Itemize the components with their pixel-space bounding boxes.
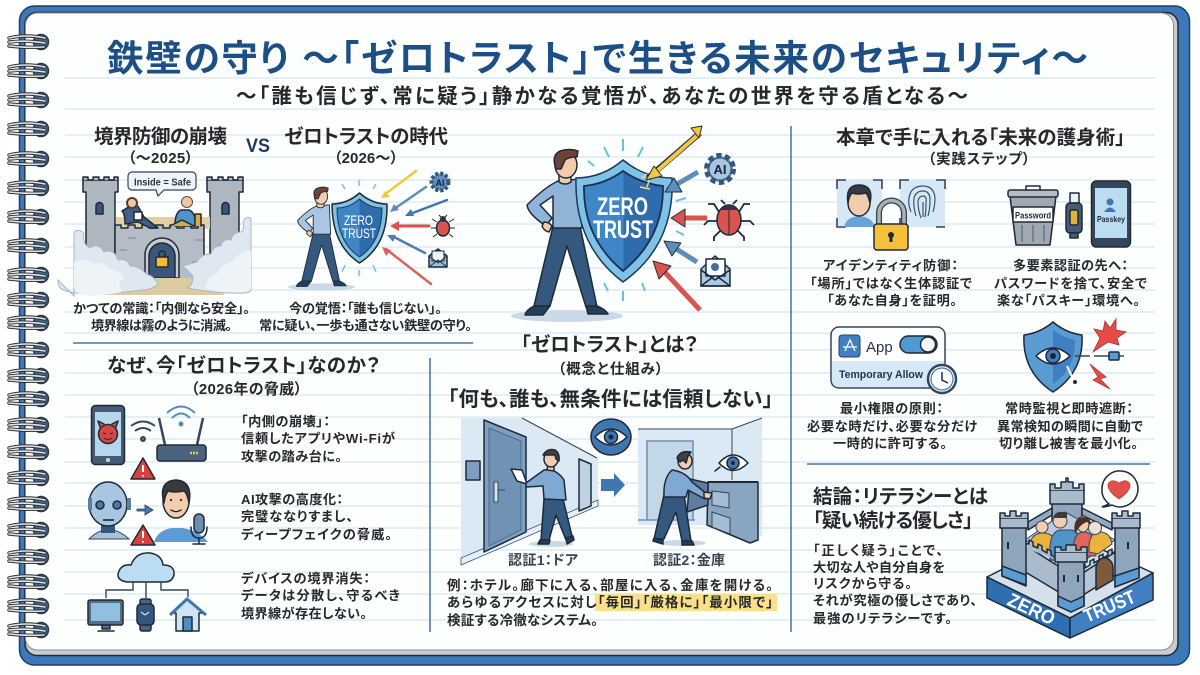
threat arrows small [381, 171, 447, 284]
subheading: concept: （概念と仕組み） [558, 361, 663, 378]
icon: security key [1066, 193, 1082, 238]
text: device perimeter [241, 570, 400, 621]
shield label big [593, 193, 653, 244]
captions: old thinking: かつての常識：「内側なら安全」。 [73, 300, 250, 316]
caption: least privilege [807, 400, 977, 451]
text: inner collapse: 「内側の崩壊」： [241, 413, 330, 429]
label: auth 2: 認証2：金庫 [653, 552, 725, 568]
captions: new resolve: 今の覚悟：「誰も信じない」。 [289, 300, 442, 316]
body text: conclusion: リスクから守る。 [813, 575, 912, 591]
icon: mail small [429, 249, 447, 267]
text: inner collapse [241, 413, 395, 464]
caption: monitoring [997, 400, 1143, 451]
icon: house [170, 599, 206, 631]
icon: large eye [591, 419, 631, 455]
text: AI attacks: ディープフェイクの脅威。 [241, 526, 392, 542]
caption: least privilege: 一時的に許可する。 [833, 435, 947, 451]
text: AI attacks [241, 491, 392, 542]
icon: red burst [1093, 319, 1126, 352]
caption: identity: 「あなた自身」を証明。 [827, 292, 957, 308]
panel: what is zero trust [447, 333, 777, 628]
icon: AI gear [707, 156, 733, 182]
text: device perimeter: 境界線が存在しない。 [241, 605, 367, 621]
heading: zero trust era: ゼロトラストの時代 [284, 125, 448, 148]
icon: passkey phone [1092, 181, 1130, 247]
text: device perimeter: デバイスの境界消失： [241, 570, 370, 586]
panel: conclusion [813, 471, 1153, 638]
icon: monitor [88, 600, 123, 631]
icon: warning two [131, 525, 155, 545]
icon: AI gear: AI [714, 162, 726, 177]
heading: conclusion: 「疑い続ける優しさ」 [813, 510, 973, 532]
caption: beyond MFA: 多要素認証の先へ： [1013, 257, 1128, 273]
illustration: person with shield and threats [288, 180, 387, 291]
body text: 例：ホテル。廊下に入る、部屋に入る、金庫を開ける。 [447, 577, 773, 593]
shield label small: ZERO [344, 212, 373, 228]
icon: AI gear small [432, 174, 448, 190]
captions: new resolve: 常に疑い、一歩も通さない鉄壁の守り。 [259, 317, 472, 333]
icon: clock [928, 365, 956, 393]
caption: monitoring: 切り離し被害を最小化。 [999, 435, 1138, 451]
icon: trash can with password: Password [1015, 210, 1051, 220]
shield label small [342, 212, 376, 241]
body text: conclusion: 大切な人や自分自身を [813, 559, 945, 575]
shield label big: ZERO [597, 193, 648, 221]
text: device perimeter: データは分散し、守るべき [241, 587, 400, 603]
icon: red bolt [1090, 364, 1110, 389]
icon: padlock [874, 200, 908, 250]
threat arrows big [646, 126, 707, 310]
text: inner collapse: 攻撃の踏み台に。 [241, 448, 342, 464]
label: auth 1: 認証1：ドア [508, 552, 578, 568]
caption: identity: 「場所」ではなく生体認証で [810, 275, 972, 291]
label: ZERO on base: ZERO [1004, 590, 1058, 630]
speech bubble: Inside = Safe: Inside = Safe [134, 176, 191, 188]
icon: compromised phone [92, 406, 124, 464]
spiral binding rings [9, 34, 48, 638]
illustration: fortress with family [987, 478, 1153, 638]
icon: router [157, 406, 206, 461]
illustration: castle in fog [58, 177, 251, 296]
icon: fingerprint scan [900, 180, 945, 227]
shield label small: TRUST [342, 225, 376, 241]
arrow: robot to person [137, 505, 153, 515]
center hero: person with zero trust shield [511, 139, 686, 322]
subheading: practical steps: （実践ステップ） [928, 150, 1030, 168]
icon: bug small [431, 215, 455, 237]
icon: shield with eye [1024, 322, 1082, 392]
body text: 検証する冷徹なシステム。 [447, 612, 598, 628]
icon: mail [701, 256, 730, 286]
icon: face scan [837, 180, 882, 227]
icon: bug [704, 200, 754, 241]
body text: conclusion: 「正しく疑う」ことで、 [813, 543, 943, 558]
panel: why zero trust now [88, 354, 400, 631]
text: AI attacks: AI攻撃の高度化： [241, 491, 343, 507]
icon: AI gear small: AI [436, 178, 444, 188]
icon: trash can with password [1008, 186, 1058, 245]
body text [447, 577, 773, 628]
heading: perimeter collapse: 境界防御の崩壊 [94, 126, 227, 148]
caption: identity [810, 257, 972, 308]
caption: monitoring: 異常検知の瞬間に自動で [997, 418, 1143, 434]
speech bubble: Inside = Safe [128, 172, 196, 196]
caption: least privilege: 必要な時だけ、必要な分だけ [807, 418, 977, 434]
body text: conclusion: 最強のリテラシーです。 [813, 611, 952, 626]
icon: temporary allow card: App [866, 339, 893, 356]
slogan: 「何も、誰も、無条件には信頼しない」 [448, 388, 773, 411]
vs label: VS [246, 136, 270, 157]
icon: temporary allow card [831, 327, 945, 388]
period label new: （2026～） [334, 150, 398, 167]
icon: passkey phone: Passkey [1097, 214, 1125, 224]
icon: wifi [131, 422, 155, 441]
panel: future self-defense steps [807, 126, 1147, 451]
illustration: hotel safe room [638, 418, 762, 543]
icon: small eye [715, 455, 748, 471]
shield label big: TRUST [593, 216, 653, 244]
caption: least privilege: 最小権限の原則： [840, 400, 943, 416]
icon: warning one [131, 458, 155, 479]
caption: identity: アイデンティティ防御： [823, 257, 958, 273]
subheading: threats of 2026: （2026年の脅威） [191, 380, 302, 398]
captions: old thinking [73, 300, 250, 333]
body text: conclusion [813, 543, 977, 626]
illustration: hotel door [461, 418, 598, 565]
figure: person at safe [653, 452, 712, 546]
caption: beyond MFA: パスワードを捨て、安全で [994, 275, 1147, 291]
icon: temporary allow card: Temporary Allow [839, 369, 923, 381]
heading: what is zero trust: 「ゼロトラスト」とは？ [521, 333, 698, 356]
caption: beyond MFA: 楽な「パスキー」環境へ。 [997, 293, 1140, 308]
icon: watch [137, 599, 154, 631]
heading: conclusion: 結論：リテラシーとは [813, 486, 988, 508]
title: 鉄壁の守り ～「ゼロトラスト」で生きる未来のセキュリティ～ [107, 38, 1088, 79]
text: inner collapse: 信頼したアプリやWi-Fiが [241, 430, 395, 446]
heading: why now: なぜ、今「ゼロトラスト」なのか？ [107, 354, 380, 377]
heading: future self-defense: 本章で手に入れる「未来の護身術」 [836, 126, 1125, 149]
highlight [595, 594, 777, 611]
captions: old thinking: 境界線は霧のように消滅。 [91, 317, 232, 333]
figure: person at door [526, 450, 574, 547]
icon: deepfake person [154, 480, 208, 542]
label: TRUST on base: TRUST [1081, 587, 1139, 627]
body text: conclusion: それが究極の優しさであり、 [813, 592, 977, 608]
body text: あらゆるアクセスに対し「毎回」「厳格に」「最小限で」 [447, 594, 773, 610]
icon: cut cable [1075, 352, 1124, 360]
arrow: door to safe [601, 473, 625, 497]
icon: heart speech bubble [1102, 471, 1138, 507]
heading: conclusion [813, 486, 988, 532]
caption: monitoring: 常時監視と即時遮断： [1005, 400, 1133, 416]
subtitle: ～「誰も信じず、常に疑う」静かなる覚悟が、あなたの世界を守る盾となる～ [236, 84, 968, 108]
icon: cloud network [106, 553, 188, 598]
panel: perimeter defense vs zero trust [58, 125, 472, 333]
caption: beyond MFA [994, 257, 1147, 308]
ruled paper lines [65, 78, 1155, 620]
icon: robot [88, 482, 131, 539]
icon: microphone [191, 514, 207, 544]
text: AI attacks: 完璧ななりすまし、 [241, 508, 353, 524]
captions: new resolve [259, 300, 472, 333]
period label old: （～2025） [128, 150, 193, 167]
